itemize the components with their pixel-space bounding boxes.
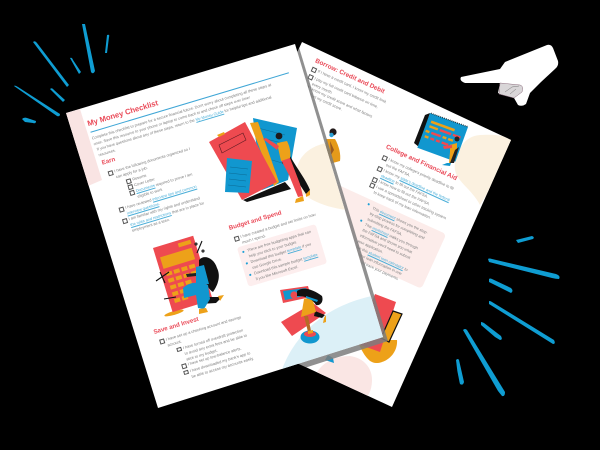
checklist item: spreadsheet: to keep track of my loan information. — [373, 190, 432, 220]
checklist item: state deadline: deadline to fill out the FAFSA. — [380, 173, 429, 199]
pink blob — [317, 356, 372, 396]
checklist item: rights — [122, 195, 205, 233]
checklist item: eligibility: Documents required to prove I am — [135, 171, 193, 193]
tip bullets: Use this student loan calculator to — [354, 245, 408, 272]
checklist item: cover letter — [128, 176, 155, 190]
resource note: resources. — [98, 148, 116, 157]
tip bullets: the FAFSA and shows you what — [362, 228, 413, 254]
intro text: Complete this checklist to prepare for a secure financial future. Don't worry about completing all these steps at — [91, 83, 272, 141]
checklist item: fill out FAFSA: I know how to fill out the FAFSA. — [378, 179, 431, 206]
pink margin strip — [66, 109, 102, 186]
cream blob — [297, 144, 345, 210]
checklist item: spreadsheet: I use a spreadsheet or other tracking system — [375, 184, 447, 220]
intro text: once. Save this resource to your phone or laptop to come back to and check off steps over time! — [93, 96, 251, 146]
pink tip box — [302, 180, 446, 289]
tip bullets: place and track your payments. — [349, 255, 399, 281]
icon: person in orange shirt — [325, 128, 340, 164]
panel: back page artwork — [298, 42, 511, 407]
tip bullets: information you'll need to submit — [359, 234, 411, 260]
checklist item: credit score: affect my credit score. — [307, 91, 343, 112]
icon: woman balancing on coin — [280, 286, 326, 344]
tip bullets: This worksheet walks you through — [364, 223, 419, 250]
checklist item: overdraft: to avoid any extra fees and be able to — [184, 332, 247, 355]
heading: Earn: Earn — [101, 156, 116, 167]
pink tip box: help you stick to your budget. — [248, 240, 297, 258]
checklist item: bank app: I have downloaded my bank's app to — [189, 350, 251, 373]
icon: documents with person — [209, 118, 310, 203]
pink tip box: Download this sample budget template — [254, 253, 318, 276]
checklist item: overdraft — [176, 327, 247, 361]
heading: Save and Invest: Save and Invest — [153, 316, 200, 336]
checklist item: overdraft: stick to my budget. — [185, 347, 218, 361]
checklist item: alerts: I have set up low-balance alerts. — [187, 346, 242, 366]
checklist item: priority deadline: out the FAFSA. — [385, 162, 411, 178]
checklist item: rights: the rules and restrictions that are in place for — [130, 200, 205, 227]
page shadow — [298, 48, 388, 368]
symbol: times — [156, 272, 169, 283]
tip bullets — [349, 203, 428, 281]
checklist item: budget: I have created a budget and set limits on how — [240, 212, 316, 239]
icon: calculator with woman — [153, 236, 224, 318]
orange half circle — [357, 340, 397, 363]
heading: College and Financial Aid: College and Financial Aid — [385, 144, 458, 182]
checklist item: resume: Resume — [132, 173, 147, 182]
title: My Money Checklist — [86, 98, 159, 128]
symbol: percent — [195, 241, 204, 253]
title rule — [90, 72, 288, 132]
pink tip box: There are free budgeting apps that can — [247, 230, 311, 253]
resource note: If you have questions about any of these steps, return to the My Money Guide for helpful tips and additional — [96, 95, 272, 152]
checklist item: checking account: I have set up a checking account and savings — [165, 314, 242, 342]
checklist item: documents: can apply for a job: — [115, 165, 148, 179]
heading: Budget and Spend: Budget and Spend — [228, 209, 282, 232]
light blue blob — [282, 296, 383, 369]
panel: back page text — [307, 58, 458, 288]
pink tip box: if you like Microsoft Excel. — [255, 265, 299, 281]
checklist item: full balance: I pay my full credit card balance on time, — [314, 76, 379, 109]
checklist item: credit score: I know my credit score and what factors — [309, 86, 373, 119]
panel: front page text — [86, 72, 326, 378]
tip bullets: your application. — [357, 239, 384, 254]
pink tip box: Download this budget template if you — [250, 242, 312, 264]
checklist item: budget: much I spend. — [241, 233, 266, 245]
checklist item: eligibility: eligible to work — [137, 187, 163, 199]
pink tip box: use Google Drive. — [252, 257, 282, 270]
heading: Borrow: Borrow: Credit and Debit — [314, 58, 386, 95]
checklist item: rights: I am familiar with my rights and understand — [128, 195, 200, 221]
checklist item: documents: I have the following documents organized so I — [114, 146, 191, 173]
panel: front page artwork — [66, 44, 388, 408]
pink tip box — [237, 224, 327, 287]
checklist item: resume — [126, 173, 147, 184]
tip bullets: by-step process for completing and — [369, 212, 425, 240]
checklist item: rights: employment as a teen. — [131, 217, 170, 233]
checklist item: priority deadline: I know my college's priority deadline to fill — [388, 157, 455, 191]
checklist item: full balance: every month. — [311, 81, 334, 95]
checklist item: cover letter: Cover Letter — [133, 176, 155, 187]
checklist item: interview: I have reviewed interview tips and common — [124, 184, 197, 210]
tip bullets: put your loan information in one — [352, 250, 402, 276]
tip bullets: This document shows you the step- — [372, 206, 428, 235]
cream blob — [454, 134, 511, 205]
checklist item: bank app: be able to access my accounts easily. — [191, 355, 254, 378]
checklist item: state deadline: I know my state's deadline and the federal — [383, 168, 451, 202]
icon: outlined orange document — [381, 311, 402, 342]
checklist item: overdraft: I have turned off overdraft protection — [182, 327, 243, 350]
icon: small blue shoe — [325, 355, 334, 363]
tip bullets: submitting the FAFSA. — [367, 217, 403, 237]
checklist item: interview: interview questions. — [126, 201, 160, 216]
checklist item: checking account: account. — [167, 339, 182, 348]
icon: red document — [355, 294, 396, 352]
checklist item: credit limit: If I have a credit card, I know my credit limit. — [317, 68, 388, 104]
icon: calendar with person — [414, 113, 468, 166]
